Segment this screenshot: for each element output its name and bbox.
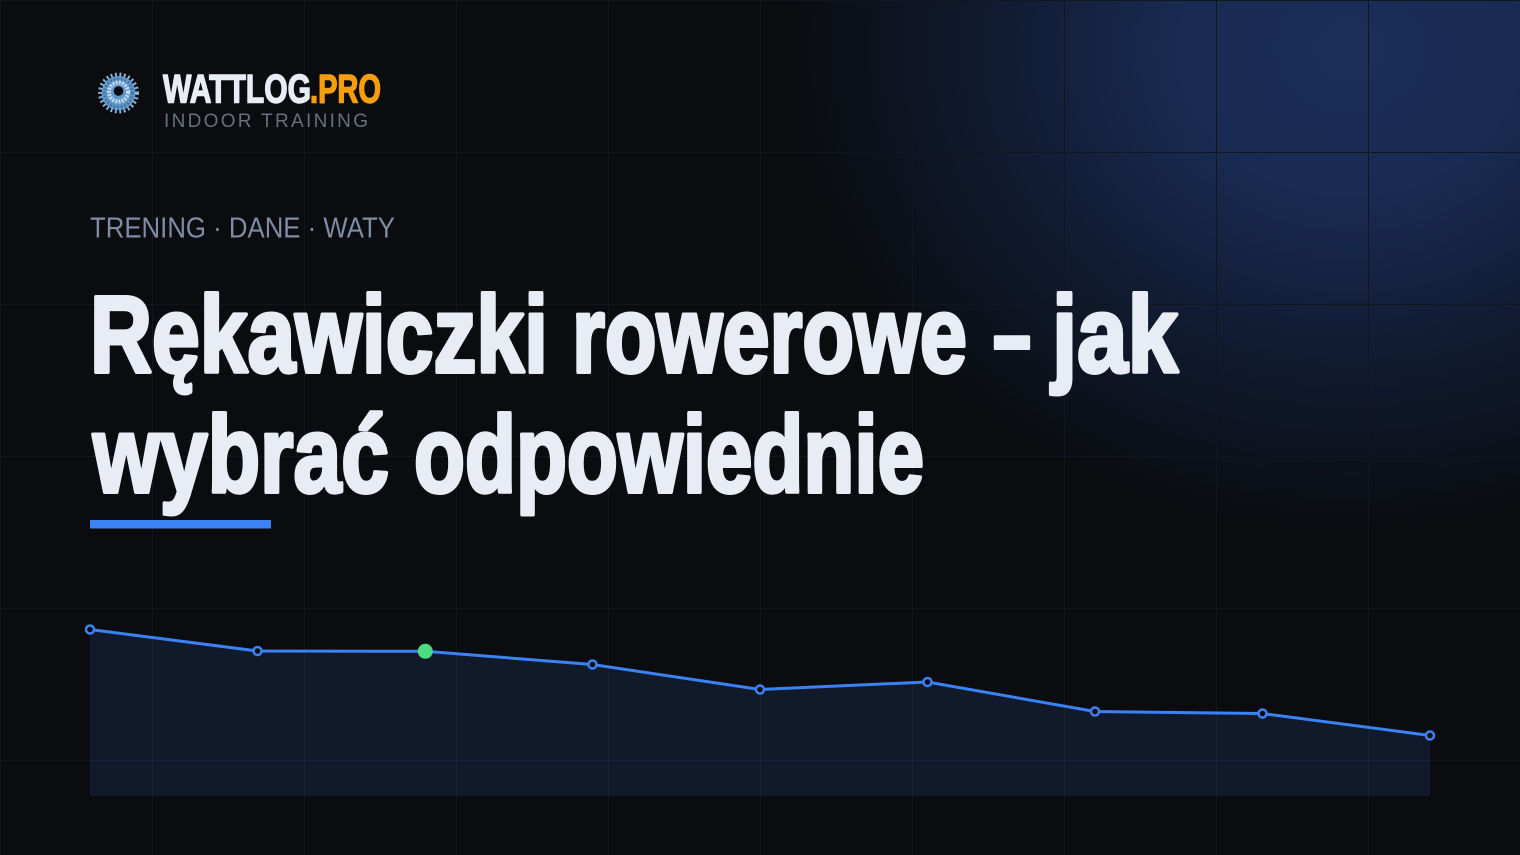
eyebrow text: TRENING · DANE · WATY <box>90 212 395 244</box>
brand name: WATTLOG <box>163 68 311 112</box>
highlighted data point <box>418 644 433 659</box>
chart area <box>90 630 1430 796</box>
title: rowerowe <box>572 274 967 396</box>
title underline <box>90 520 271 528</box>
title: jak <box>1050 274 1178 396</box>
line chart <box>86 626 1434 796</box>
title: Rękawiczki <box>90 274 548 396</box>
title: odpowiednie <box>414 394 924 516</box>
data points <box>86 626 1434 740</box>
logo <box>100 68 381 132</box>
title: – <box>993 274 1031 396</box>
chart line <box>90 630 1430 736</box>
icon: cassette gear <box>100 74 137 112</box>
tagline: INDOOR TRAINING <box>164 111 368 132</box>
title: wybrać <box>92 394 389 516</box>
title <box>90 274 1178 516</box>
brand name: .PRO <box>310 68 381 112</box>
